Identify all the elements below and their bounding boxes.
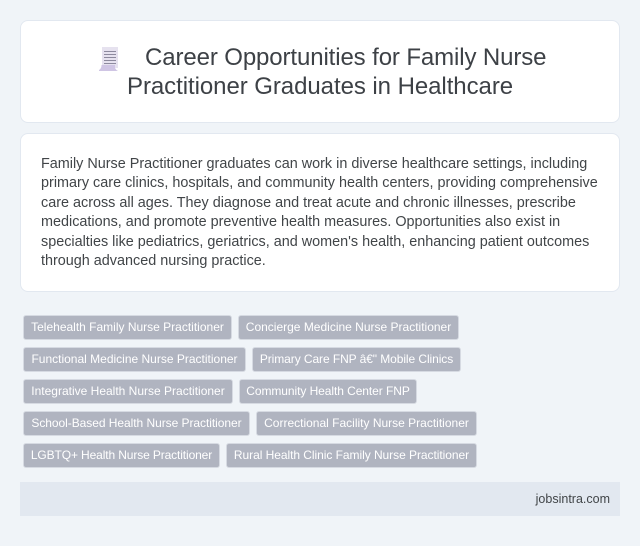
tag: Integrative Health Nurse Practitioner (23, 379, 233, 404)
title: Practitioner Graduates in Healthcare (127, 73, 513, 100)
tag: Functional Medicine Nurse Practitioner (23, 347, 246, 372)
title: Career Opportunities for Family Nurse (145, 44, 546, 71)
tag: Concierge Medicine Nurse Practitioner: Concierge Medicine Nurse Practitioner (246, 320, 451, 334)
tag: Correctional Facility Nurse Practitioner: Correctional Facility Nurse Practitioner (264, 416, 469, 430)
tag: Community Health Center FNP (239, 379, 417, 404)
tag: Integrative Health Nurse Practitioner: Integrative Health Nurse Practitioner (31, 384, 225, 398)
tag: Correctional Facility Nurse Practitioner (256, 411, 477, 436)
description text: care across all ages. They diagnose and treat acute and chronic illnesses, prescribe (41, 194, 576, 210)
footer source text: jobsintra.com (536, 492, 610, 506)
description text: primary care clinics, hospitals, and community health centers, providing comprehensive (41, 175, 598, 191)
tag: School-Based Health Nurse Practitioner: School-Based Health Nurse Practitioner (31, 416, 242, 430)
description text: Family Nurse Practitioner graduates can work in diverse healthcare settings, including (41, 156, 587, 172)
icon: document scroll (99, 47, 118, 71)
description text: medications, and promote preventive health measures. Opportunities also exist in (41, 214, 560, 230)
description text: specialties like pediatrics, geriatrics, and women's health, enhancing patient outcomes (41, 234, 589, 250)
tag: Telehealth Family Nurse Practitioner (23, 315, 232, 340)
tag: Primary Care FNP mobile clinics: Primary Care FNP â€" Mobile Clinics (260, 352, 453, 366)
tag: School-Based Health Nurse Practitioner (23, 411, 250, 436)
tag: Concierge Medicine Nurse Practitioner (238, 315, 459, 340)
tag: Functional Medicine Nurse Practitioner: Functional Medicine Nurse Practitioner (31, 352, 238, 366)
tag: Primary Care FNP mobile clinics (252, 347, 461, 372)
footer bar (20, 482, 620, 516)
tag: LGBTQ+ Health Nurse Practitioner (23, 443, 220, 468)
description panel (20, 133, 620, 292)
tag: Rural Health Clinic Family Nurse Practitioner: Rural Health Clinic Family Nurse Practitioner (234, 448, 469, 462)
tag: Rural Health Clinic Family Nurse Practitioner (226, 443, 477, 468)
description text (41, 156, 598, 269)
tag: LGBTQ+ Health Nurse Practitioner: LGBTQ+ Health Nurse Practitioner (31, 448, 212, 462)
description text: through advanced nursing practice. (41, 253, 266, 269)
tag: Community Health Center FNP: Community Health Center FNP (246, 384, 410, 398)
title (127, 44, 546, 100)
tag: Telehealth Family Nurse Practitioner: Telehealth Family Nurse Practitioner (31, 320, 224, 334)
header panel (20, 20, 620, 123)
